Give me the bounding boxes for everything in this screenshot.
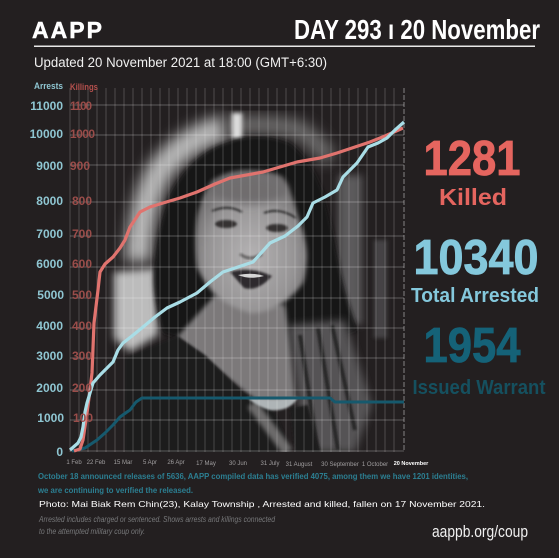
killings axis labels: 600 — [72, 257, 92, 271]
lips — [230, 270, 272, 289]
killings axis labels: 800 — [72, 194, 92, 208]
axis title: killings: Killings — [70, 82, 98, 92]
stat: total arrested — [411, 231, 539, 307]
arrests axis labels: 8000 — [36, 194, 63, 208]
killings axis labels — [70, 99, 95, 425]
neck and chest — [177, 295, 295, 410]
line: arrests — [70, 122, 404, 450]
stat: issued warrant: 1954 — [424, 319, 520, 373]
date axis labels: 26 Apr — [167, 460, 185, 466]
methodology note — [38, 515, 275, 536]
date axis labels: 31 July — [260, 461, 280, 467]
forehead shadow — [212, 176, 288, 204]
killings axis labels: 400 — [72, 319, 92, 333]
stat: issued warrant — [412, 319, 546, 399]
line: issued warrant — [72, 398, 404, 451]
methodology note: to the attempted military coup only. — [39, 527, 145, 536]
arrests axis labels: 6000 — [36, 257, 63, 271]
date axis labels: 1 Feb — [66, 460, 82, 466]
nose — [240, 254, 262, 258]
header rule — [34, 46, 535, 47]
arrests axis labels: 11000 — [30, 99, 63, 113]
face — [196, 170, 307, 313]
axis title: arrests: Arrests — [34, 81, 63, 91]
date axis labels: 1 October — [362, 462, 388, 468]
killings axis labels: 700 — [72, 227, 92, 241]
lower hair strands — [288, 320, 372, 452]
portrait photo — [114, 113, 387, 452]
updated timestamp: Updated 20 November 2021 at 18:00 (GMT+6:30) — [34, 55, 327, 70]
killings axis labels: 300 — [72, 349, 92, 363]
date axis labels: 30 September — [321, 462, 359, 468]
eyebrows — [212, 208, 296, 218]
killings axis labels: 200 — [72, 381, 92, 395]
killings axis labels: 900 — [70, 159, 90, 173]
note on releases — [37, 472, 468, 495]
chart grid — [70, 88, 404, 452]
website link: aappb.org/coup — [432, 522, 528, 541]
stat: killed: 1281 — [424, 132, 520, 186]
killings axis labels: 1000 — [70, 127, 95, 141]
teeth — [238, 274, 264, 278]
arrests axis labels: 4000 — [36, 319, 63, 333]
arrests axis labels — [30, 99, 64, 459]
arrests axis labels: 5000 — [37, 288, 64, 302]
date axis labels: 15 Mar — [114, 460, 132, 466]
arrests axis labels: 7000 — [36, 227, 63, 241]
line: killings — [74, 128, 403, 451]
stat: issued warrant: Issued Warrant — [412, 377, 546, 399]
dress left of neckline — [128, 336, 278, 422]
stat: total arrested: 10340 — [414, 231, 538, 285]
arrests axis labels: 2000 — [36, 381, 63, 395]
methodology note: Arrested includes charged or sentenced. Shows arrests and killings connected — [38, 515, 275, 524]
date axis labels: 31 August — [286, 462, 313, 468]
arrests axis labels: 3000 — [36, 349, 63, 363]
stat: total arrested: Total Arrested — [411, 285, 539, 307]
date axis labels: 5 Apr — [143, 460, 157, 466]
collar highlight — [247, 397, 298, 410]
note on releases: we are continuing to verified the released. — [37, 486, 193, 495]
eyes — [215, 220, 237, 228]
killings axis labels: 1100 — [70, 99, 92, 113]
date axis labels: 17 May — [196, 461, 216, 467]
halo arc behind head — [138, 128, 225, 262]
photo caption: Photo: Mai Biak Rem Chin(23), Kalay Township , Arrested and killed, fallen on 17 November 2021. — [39, 499, 485, 509]
arrests axis labels: 9000 — [36, 159, 63, 173]
note on releases: October 18 announced releases of 5636, AAPP compiled data has verified 4075, among them we have 1201 identities, — [38, 472, 468, 481]
stat: killed: Killed — [439, 184, 507, 210]
stat: killed — [424, 132, 520, 210]
date axis labels: 22 Feb — [87, 460, 106, 466]
arrests axis labels: 1000 — [37, 411, 64, 425]
dress right below collar — [290, 405, 320, 452]
arrests axis labels: 10000 — [30, 127, 63, 141]
date axis labels — [66, 460, 429, 468]
date axis labels: 30 Jun — [229, 461, 247, 467]
header: AAPP: AAPP — [32, 17, 102, 43]
killings axis labels: 500 — [72, 288, 92, 302]
arrests axis labels: 0 — [56, 445, 63, 459]
hair — [154, 136, 358, 352]
date axis labels: 20 November — [394, 461, 429, 467]
killings axis labels: 100 — [73, 411, 93, 425]
dress strap — [252, 404, 288, 452]
